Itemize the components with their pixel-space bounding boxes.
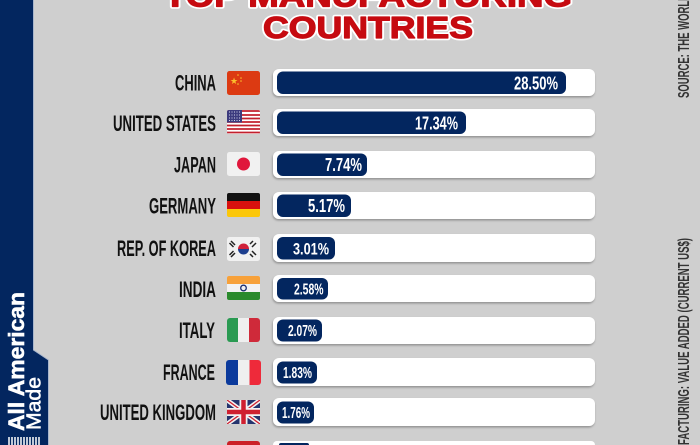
bar value bbox=[279, 443, 309, 445]
row: China: 28.50% bbox=[514, 74, 558, 94]
row: Japan bbox=[174, 151, 595, 178]
title bbox=[164, 0, 572, 45]
row: United Kingdom: 1.76% bbox=[282, 405, 310, 422]
row: Republic of Korea bbox=[117, 234, 595, 262]
row: United States: UNITED STATES bbox=[113, 111, 216, 136]
bar value bbox=[277, 402, 314, 424]
row: United Kingdom: UNITED KINGDOM bbox=[100, 400, 216, 425]
brand name: All American Made bbox=[4, 292, 46, 431]
bar value bbox=[277, 278, 328, 300]
row: Japan: JAPAN bbox=[174, 152, 216, 178]
flag: cropped red flag bbox=[227, 441, 260, 445]
flag: Japan bbox=[227, 152, 260, 176]
row: France: 1.83% bbox=[283, 365, 312, 382]
row: France: FRANCE bbox=[163, 360, 215, 385]
bar track bbox=[273, 358, 595, 386]
row: China: CHINA bbox=[175, 70, 216, 96]
flag: Germany bbox=[227, 193, 260, 217]
flag: United States bbox=[227, 110, 260, 134]
flag: China: ★ bbox=[230, 77, 238, 87]
bar value bbox=[277, 362, 317, 384]
bar track bbox=[273, 398, 595, 426]
row: Japan: 7.74% bbox=[325, 155, 362, 175]
bar track bbox=[273, 234, 595, 262]
bar track bbox=[273, 151, 595, 178]
row: India: 2.58% bbox=[294, 282, 324, 298]
title: COUNTRIES bbox=[263, 10, 473, 45]
row: Italy: ITALY bbox=[179, 318, 215, 343]
bar track bbox=[273, 317, 595, 344]
row: Republic of Korea: REP. OF KOREA bbox=[117, 236, 216, 261]
flag: China bbox=[227, 71, 260, 95]
bar value bbox=[277, 112, 466, 134]
flag: France bbox=[226, 360, 261, 385]
title: COUNTRIES bbox=[263, 10, 473, 45]
row: India bbox=[179, 275, 595, 302]
flag: Italy bbox=[227, 318, 260, 342]
bar track bbox=[273, 69, 595, 96]
bar track bbox=[273, 109, 595, 136]
bar value bbox=[277, 237, 335, 260]
row: China bbox=[175, 69, 595, 96]
bar value bbox=[277, 154, 367, 176]
bar value bbox=[277, 320, 322, 342]
row: India: INDIA bbox=[179, 277, 216, 302]
bar track bbox=[273, 441, 595, 445]
flag: South Korea bbox=[227, 237, 260, 261]
row: tenth country (cropped at bottom edge) bbox=[227, 441, 595, 445]
brand name: All American Made: All American bbox=[4, 292, 29, 431]
row: Germany bbox=[149, 192, 595, 219]
bar value bbox=[277, 194, 351, 217]
row: France bbox=[163, 358, 595, 386]
row: Italy bbox=[179, 317, 595, 344]
bar track bbox=[273, 275, 595, 302]
brand logo stripes bbox=[9, 437, 39, 445]
flag: United Kingdom bbox=[227, 400, 260, 424]
flag: India bbox=[227, 276, 260, 300]
row: Germany: 5.17% bbox=[308, 196, 345, 216]
bar track bbox=[273, 192, 595, 219]
brand side band bbox=[0, 0, 48, 445]
row: United Kingdom bbox=[100, 398, 595, 426]
brand name: All American Made: Made bbox=[24, 377, 46, 430]
source metric note: FACTURING: VALUE ADDED (CURRENT US$) bbox=[676, 238, 693, 445]
row: United States: 17.34% bbox=[415, 114, 458, 134]
row: Republic of Korea: 3.01% bbox=[293, 240, 329, 258]
bar value bbox=[277, 72, 566, 94]
row: Italy: 2.07% bbox=[288, 323, 317, 340]
row: Germany: GERMANY bbox=[149, 194, 216, 218]
row: United States bbox=[113, 109, 595, 136]
